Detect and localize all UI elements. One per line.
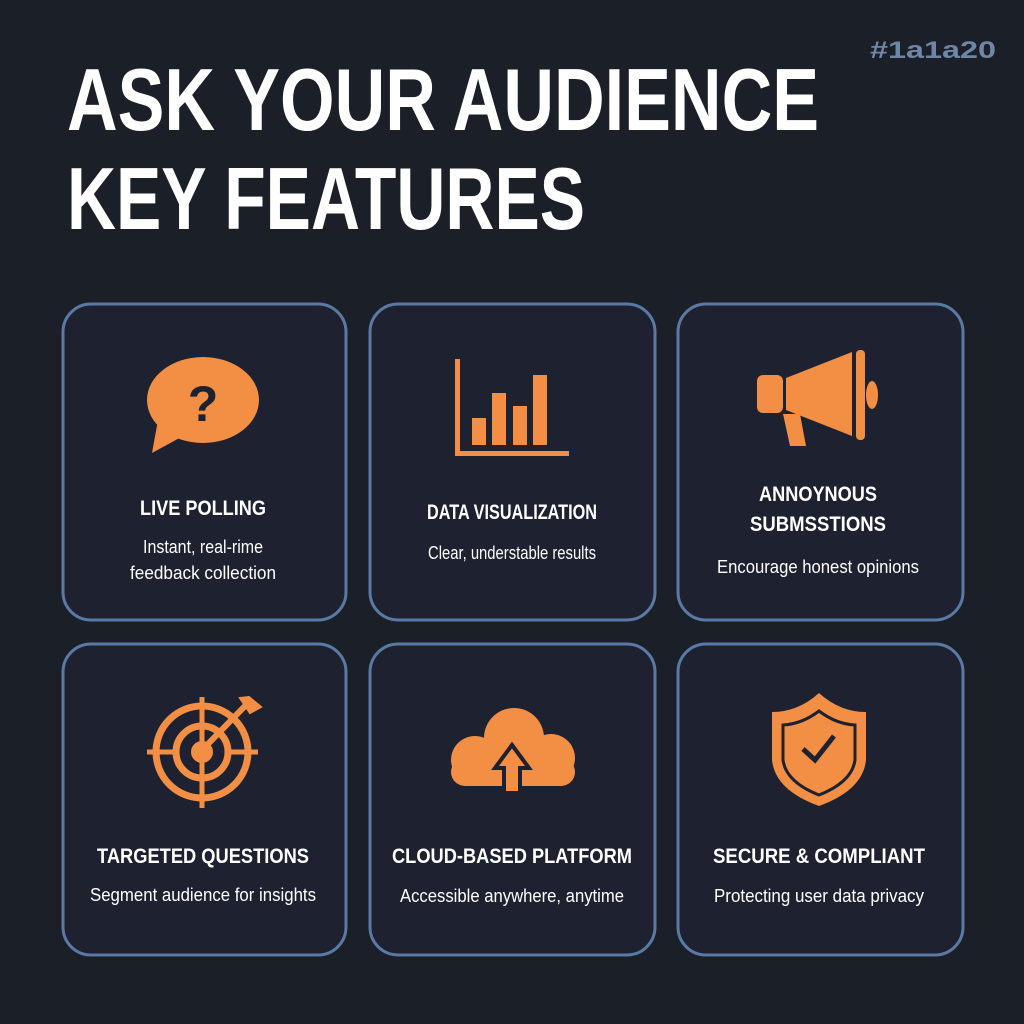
panel: cloud-based platform: Accessible anywhere, anytime [400,886,624,906]
panel: data visualization [370,304,655,620]
panel: anonymous submissions: SUBMSSTIONS [750,513,886,536]
panel: secure & compliant: SECURE & COMPLIANT [713,845,925,868]
title [67,50,819,248]
icon: target with arrow [147,697,261,808]
panel: live polling: LIVE POLLING [140,497,266,520]
panel: anonymous submissions: Encourage honest opinions [717,557,919,577]
icon: shield with check [772,693,866,806]
panel: targeted questions [63,644,346,955]
panel: live polling [63,304,346,620]
panel: data visualization: Clear, understable results [428,543,596,563]
icon: cloud upload [451,708,575,793]
panel: live polling: feedback collection [130,563,276,583]
panel: targeted questions: TARGETED QUESTIONS [97,845,309,868]
panel: data visualization: DATA VISUALIZATION [427,501,597,524]
panel: cloud-based platform: CLOUD-BASED PLATFORM [392,845,632,868]
panel: cloud-based platform [370,644,655,955]
panel: targeted questions: Segment audience for insights [90,885,316,905]
panel: secure & compliant [678,644,963,955]
icon: question speech bubble [147,357,259,453]
icon: megaphone [757,350,878,446]
panel: anonymous submissions [678,304,963,620]
title: KEY FEATURES [67,149,585,248]
panel: secure & compliant: Protecting user data privacy [714,886,924,906]
hex code label: #1a1a20 [870,37,996,64]
title: ASK YOUR AUDIENCE [67,50,819,149]
panel: anonymous submissions: ANNOYNOUS [759,483,877,506]
icon: bar chart [455,359,569,456]
panel: live polling: Instant, real-rime [143,537,263,557]
icon: question speech bubble: ? [188,376,218,432]
